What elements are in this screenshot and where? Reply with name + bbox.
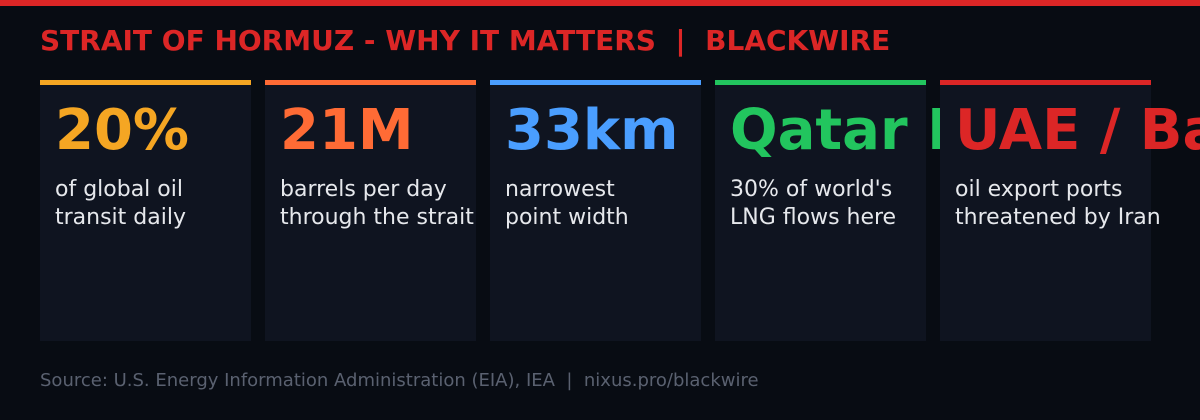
caption: point width — [505, 205, 629, 230]
footer source: Source: U.S. Energy Information Administration (EIA), IEA | nixus.pro/blackwire — [40, 370, 759, 391]
title: STRAIT OF HORMUZ - WHY IT MATTERS | BLACKWIRE — [40, 24, 890, 57]
top accent bar — [0, 0, 1200, 6]
caption: threatened by Iran — [955, 205, 1161, 230]
panel: width — [490, 80, 701, 341]
caption — [280, 177, 474, 230]
caption: oil export ports — [955, 177, 1122, 202]
caption — [730, 177, 896, 230]
caption — [955, 177, 1161, 230]
caption — [55, 177, 186, 230]
panel: barrels — [265, 80, 476, 341]
stat: 21M: 21M — [280, 98, 414, 163]
caption: transit daily — [55, 205, 186, 230]
stat: 20%: 20% — [55, 98, 189, 163]
caption: LNG flows here — [730, 205, 896, 230]
caption: through the strait — [280, 205, 474, 230]
caption: narrowest — [505, 177, 615, 202]
caption: 30% of world's — [730, 177, 892, 202]
caption: of global oil — [55, 177, 183, 202]
stat: Qatar LNG: Qatar LNG — [730, 98, 1056, 163]
panel: global oil — [40, 80, 251, 341]
caption: barrels per day — [280, 177, 447, 202]
stat: 33km: 33km — [505, 98, 679, 163]
panel: UAE / Bahrain — [940, 80, 1151, 341]
caption — [505, 177, 629, 230]
panel: Qatar LNG — [715, 80, 926, 341]
